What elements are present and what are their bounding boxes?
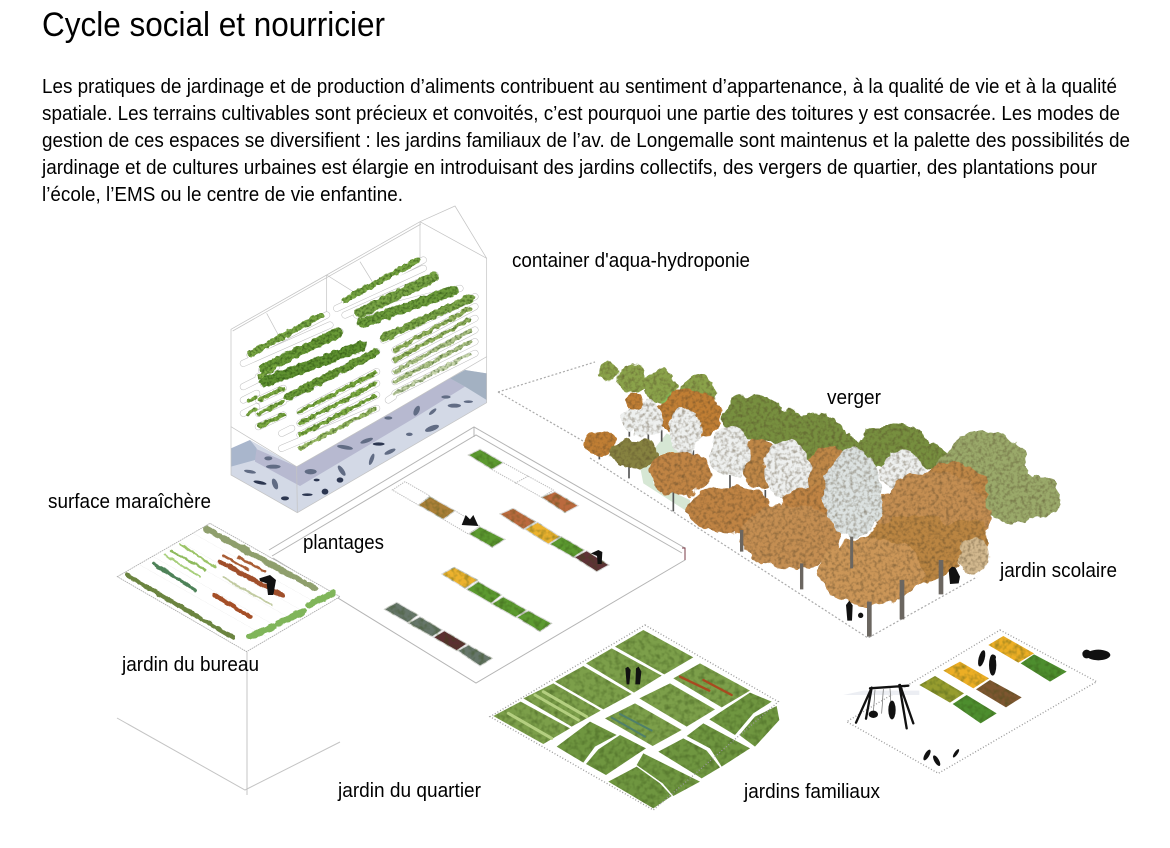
- pool blue corners: [231, 440, 257, 467]
- dotted school plate: [847, 630, 1097, 773]
- icon: gardener: [259, 575, 276, 595]
- icon: people in plantages: [462, 515, 602, 564]
- crop rows in plots: [508, 677, 732, 738]
- dotted planter strips: [392, 463, 553, 534]
- school beds: [919, 636, 1067, 723]
- trunks: small trees: [599, 423, 785, 527]
- panel: verger plate: [498, 362, 977, 638]
- white blossoming trees: [621, 399, 926, 500]
- pool lavender band: [255, 378, 465, 486]
- front orange trees: [648, 451, 990, 568]
- intro paragraph: Les pratiques de jardinage et de production d’aliments contribuent au sentiment d’appartenance, à la qualité de vie et à la qualité: [42, 76, 1117, 98]
- container wireframe: [231, 206, 487, 513]
- large trunks: [742, 530, 941, 637]
- foreground orange trees: [817, 515, 990, 605]
- beds: green: [467, 449, 584, 632]
- panel: surface maraîchère: [117, 523, 340, 652]
- label: surface maraîchère: surface maraîchère: [48, 491, 211, 513]
- fish silhouettes: [244, 395, 473, 500]
- box: jardin du bureau: [117, 652, 340, 795]
- plate: [117, 523, 340, 652]
- label: jardin scolaire: jardin scolaire: [999, 560, 1117, 582]
- panel: plantages plate: [269, 427, 685, 683]
- title: Cycle social et nourricier: [42, 6, 385, 44]
- row lines: [140, 533, 320, 637]
- label: jardin du bureau: jardin du bureau: [121, 654, 259, 676]
- middle orange trees: [584, 391, 987, 525]
- pool blue corner right: [450, 370, 487, 400]
- icon: children and birds: [922, 650, 1110, 767]
- icon: swing: [843, 685, 919, 728]
- label: verger: verger: [827, 387, 881, 409]
- intro paragraph: gestion de ces espaces se diversifient : les jardins familiaux de l’av. de Longemalle sont maintenus et la palette des possibilités de: [42, 130, 1130, 152]
- hydroponic green plants: [248, 261, 470, 448]
- dense rooftop foliage, block two: [359, 277, 433, 313]
- illustration: aqua-hydroponic container: [231, 206, 487, 513]
- beds: earth, red and grey: [418, 497, 455, 519]
- tall white tree: [824, 448, 883, 538]
- hydroponic trays: [243, 260, 475, 448]
- label: jardins familiaux: jardins familiaux: [743, 781, 880, 803]
- intro paragraph: [41, 76, 1130, 206]
- icon: walkers: [846, 567, 960, 621]
- dotted edge: [490, 625, 778, 810]
- pale ground shadows: [640, 433, 690, 513]
- label: jardin du quartier: jardin du quartier: [337, 780, 481, 802]
- label: container d'aqua-hydroponie: container d'aqua-hydroponie: [512, 250, 750, 272]
- fish pool floor: [231, 370, 487, 513]
- illustration: orchard: [584, 363, 1059, 637]
- panel: jardins familiaux: [490, 625, 779, 810]
- allotment plots: [493, 630, 779, 808]
- dense rooftop foliage, block one: [265, 333, 337, 368]
- icon: two people: [625, 667, 641, 684]
- back green trees: [599, 363, 1059, 522]
- intro paragraph: l’école, l’EMS ou le centre de vie enfantine.: [42, 184, 403, 206]
- vegetable rows: [127, 529, 333, 638]
- panel: jardin scolaire: [843, 630, 1110, 773]
- intro paragraph: jardinage et de cultures urbaines est élargie en introduisant des jardins collectifs, des vergers de quartier, des plantations pour: [41, 157, 1097, 179]
- intro paragraph: spatiale. Les terrains cultivables sont précieux et convoités, c’est pourquoi une partie des toitures y est consacrée. Les modes de: [42, 103, 1120, 125]
- plantages beds: [384, 449, 609, 666]
- label: plantages: plantages: [303, 532, 384, 554]
